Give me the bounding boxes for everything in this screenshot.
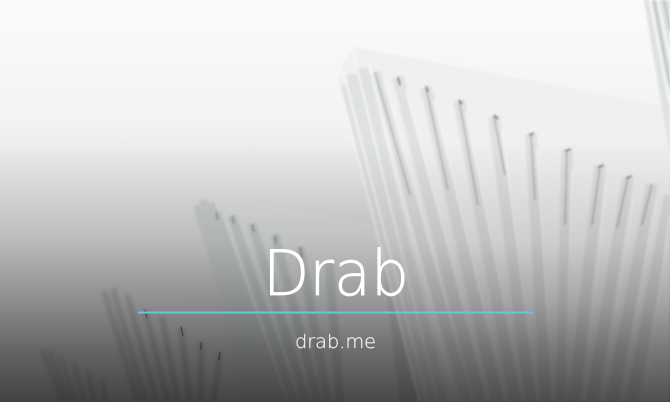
corner structure, top right — [644, 0, 670, 155]
fan body — [338, 47, 670, 402]
small fan structure — [100, 282, 240, 402]
large fan structure — [338, 47, 670, 402]
medium fan structure — [192, 192, 400, 402]
title: Drab — [263, 237, 409, 310]
blade slots — [375, 72, 652, 228]
domain text: drab.me — [295, 331, 376, 353]
blade shading — [345, 68, 670, 402]
blade highlights — [339, 52, 670, 402]
far fan structure, bottom left — [42, 348, 105, 402]
divider line — [138, 312, 533, 314]
small fan slots — [145, 310, 220, 360]
